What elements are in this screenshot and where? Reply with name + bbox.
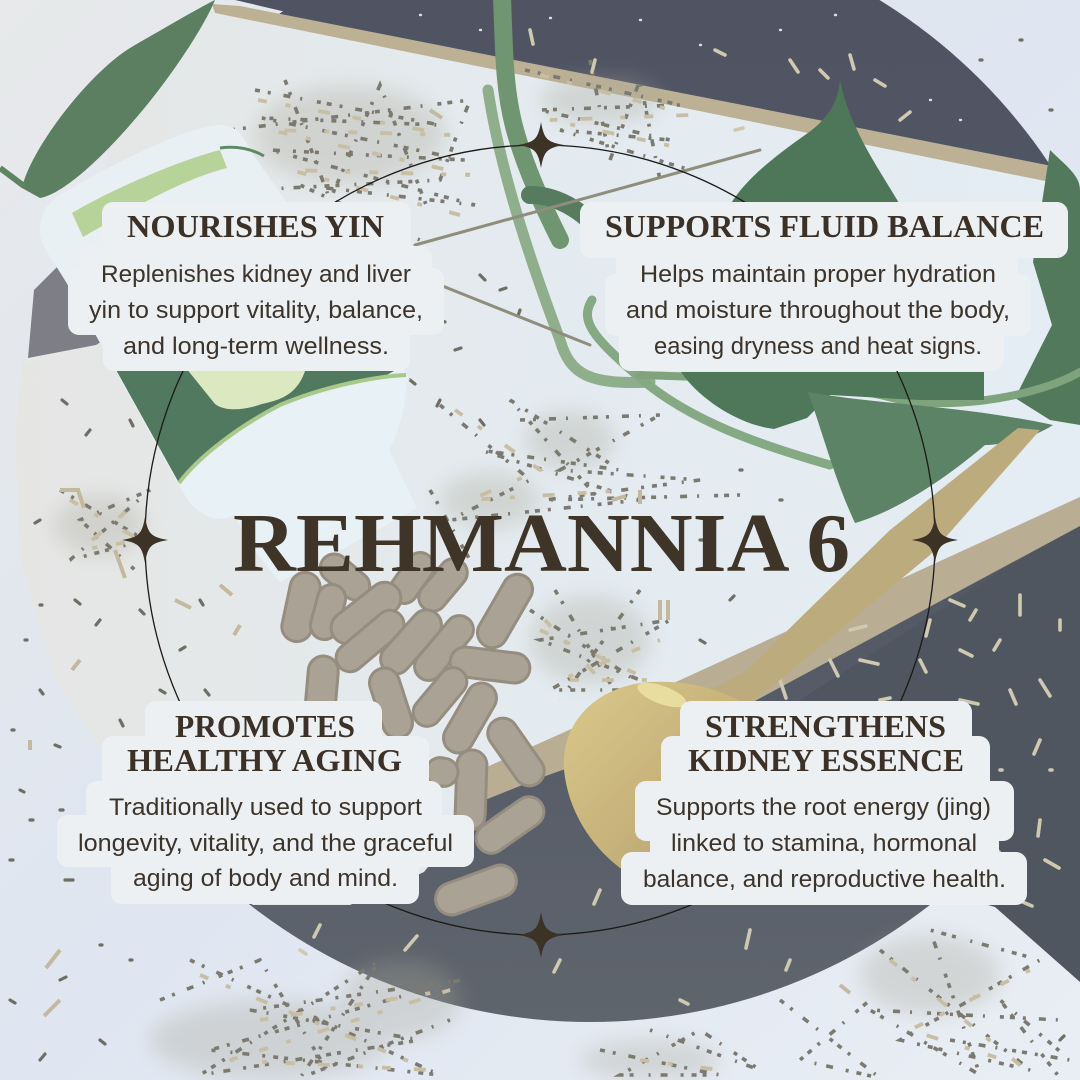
thin ring bbox=[145, 145, 935, 935]
star left bbox=[122, 517, 168, 563]
star right bbox=[912, 517, 958, 563]
heading bbox=[127, 708, 402, 778]
body text: yin to support vitality, balance, bbox=[89, 297, 423, 324]
leaf big lower bbox=[808, 392, 1053, 523]
panel: nourishes yin bbox=[68, 202, 444, 371]
body text: and moisture throughout the body, bbox=[626, 297, 1010, 324]
body text: aging of body and mind. bbox=[133, 865, 398, 892]
dark tray corner lower right bbox=[800, 520, 1080, 982]
leaf far right bbox=[1015, 150, 1080, 425]
stems bbox=[415, 0, 1080, 465]
body text bbox=[626, 261, 1010, 360]
heading: NOURISHES YIN bbox=[127, 208, 384, 244]
body text: longevity, vitality, and the graceful bbox=[78, 830, 453, 857]
heading: KIDNEY ESSENCE bbox=[688, 742, 964, 778]
bottle bbox=[40, 125, 417, 582]
heading: PROMOTES bbox=[175, 708, 355, 744]
bottle green stripe at label top bbox=[220, 147, 264, 156]
leaf top left bbox=[22, 0, 215, 198]
leaf middle bbox=[681, 372, 984, 429]
panel background bbox=[57, 701, 474, 904]
capsules bbox=[279, 547, 550, 919]
gold strip top bbox=[212, 4, 1052, 182]
plate bright specks bbox=[420, 15, 961, 120]
body text: and long-term wellness. bbox=[123, 333, 389, 360]
title: REHMANNIA 6 bbox=[233, 497, 850, 590]
bottle cap and top bbox=[40, 125, 410, 487]
bottle lime stripe bbox=[179, 375, 406, 483]
gold band lower right bbox=[480, 497, 1080, 800]
body text: Supports the root energy (jing) bbox=[656, 794, 991, 821]
bottle label medallion bbox=[186, 368, 306, 409]
panel: strengthens kidney essence bbox=[621, 701, 1027, 905]
dark sliver left of bottle bbox=[28, 262, 112, 358]
body text: linked to stamina, hormonal bbox=[671, 830, 977, 857]
body text bbox=[643, 794, 1006, 893]
bottle green body bbox=[115, 368, 400, 483]
star bottom bbox=[518, 912, 564, 958]
panel: promotes healthy aging bbox=[57, 701, 474, 904]
body text: Traditionally used to support bbox=[109, 794, 422, 821]
bottle label band bbox=[72, 150, 227, 237]
panel: supports fluid balance bbox=[580, 202, 1068, 371]
heading: SUPPORTS FLUID BALANCE bbox=[605, 208, 1044, 244]
heading: HEALTHY AGING bbox=[127, 742, 402, 778]
panel background bbox=[580, 202, 1068, 371]
herb bits on dark plate bbox=[300, 30, 1060, 1004]
plate upper left corner bbox=[235, 0, 620, 90]
star top bbox=[518, 122, 564, 168]
body text: Replenishes kidney and liver bbox=[101, 261, 411, 288]
spoon highlight bbox=[634, 678, 690, 712]
body text: balance, and reproductive health. bbox=[643, 866, 1006, 893]
body text bbox=[78, 794, 453, 892]
body text bbox=[89, 261, 423, 360]
herb bits tan loose bbox=[30, 110, 850, 1016]
heading bbox=[688, 708, 964, 778]
body text: easing dryness and heat signs. bbox=[654, 333, 982, 360]
spoon bowl bbox=[564, 682, 742, 868]
panel background bbox=[621, 701, 1027, 905]
ring with stars bbox=[122, 122, 958, 958]
body text: Helps maintain proper hydration bbox=[640, 261, 996, 288]
panel background bbox=[68, 202, 444, 371]
leaf top right bbox=[730, 80, 900, 205]
bottle base and neck bbox=[179, 375, 417, 582]
heading: STRENGTHENS bbox=[705, 708, 946, 744]
spoon handle bbox=[700, 428, 1040, 702]
